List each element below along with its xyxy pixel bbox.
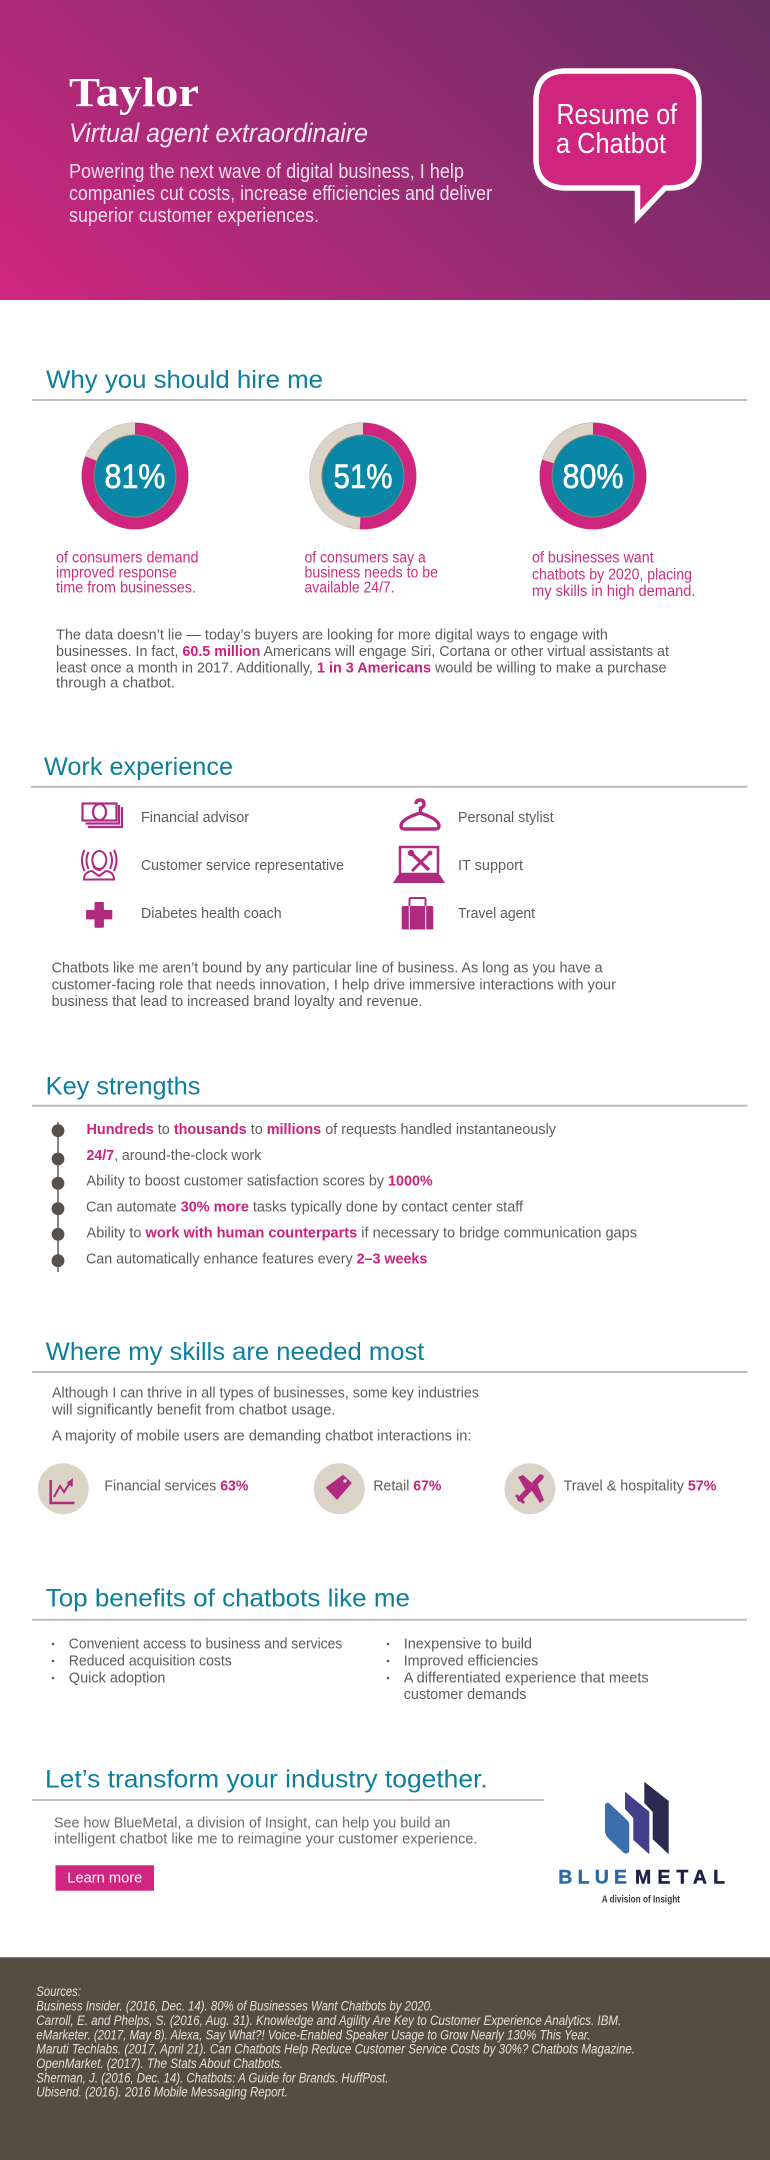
button: learn more bbox=[56, 1865, 154, 1891]
text block: industries intro: will significantly benefit from chatbot usage. bbox=[51, 1402, 336, 1419]
icon: price tag bbox=[314, 1463, 365, 1514]
label: travel agent: Travel agent bbox=[458, 905, 536, 922]
panel: header banner bbox=[0, 0, 770, 300]
list: benefits right: Inexpensive to build bbox=[404, 1635, 532, 1652]
text block: line of business paragraph: business that lead to increased brand loyalty and revenue. bbox=[52, 993, 422, 1010]
donut chart: 51% bbox=[310, 422, 416, 530]
speech bubble: a Chatbot bbox=[556, 128, 666, 160]
caption: 80%: my skills in high demand. bbox=[532, 583, 696, 600]
timeline bbox=[52, 1122, 64, 1272]
icon: laptop with tools bbox=[393, 847, 445, 883]
caption: 80%: chatbots by 2020, placing bbox=[532, 566, 692, 583]
text block: sources bbox=[36, 1984, 635, 2100]
logo: BlueMetal: METAL bbox=[635, 1866, 725, 1888]
logo: BlueMetal bbox=[558, 1782, 725, 1906]
speech bubble bbox=[536, 71, 699, 217]
donut chart: 81%: 81% bbox=[104, 458, 166, 496]
list of strengths: Hundreds to thousands to millions of requests handled instantaneously bbox=[86, 1121, 556, 1138]
icon: headset agent bbox=[82, 850, 116, 880]
text block: data paragraph: The data doesn’t lie — today’s buyers are looking for more digital ways to engage with bbox=[56, 626, 608, 643]
caption: 81%: improved response bbox=[56, 565, 177, 582]
stat: financial services: Financial services 63% bbox=[104, 1478, 248, 1495]
stat: retail: Retail 67% bbox=[373, 1478, 441, 1495]
subtitle: Virtual agent extraordinaire bbox=[69, 118, 368, 148]
list: benefits left: Quick adoption bbox=[69, 1669, 166, 1686]
list: benefits left: Convenient access to business and services bbox=[69, 1635, 342, 1652]
text block: sources: Maruti Techlabs. (2017, April 21). Can Chatbots Help Reduce Customer Service Costs by 30%? Chatbots Magazine. bbox=[36, 2042, 635, 2057]
text block: line of business paragraph: Chatbots like me aren’t bound by any particular line of business. As long as you have a bbox=[52, 960, 603, 977]
heading: Let’s transform your industry together. bbox=[45, 1766, 488, 1794]
list of strengths: 24/7, around-the-clock work bbox=[86, 1147, 262, 1164]
stat: travel and hospitality: Travel & hospitality 57% bbox=[564, 1478, 716, 1495]
text block: call to action copy bbox=[54, 1814, 477, 1848]
label: customer service representative: Customer service representative bbox=[141, 857, 344, 874]
list of strengths: Ability to boost customer satisfaction scores by 1000% bbox=[86, 1173, 433, 1190]
donut chart: 80%: 80% bbox=[562, 458, 624, 496]
heading: Where my skills are needed most bbox=[46, 1338, 424, 1366]
caption: 80% bbox=[532, 550, 696, 600]
text block: industries intro: A majority of mobile users are demanding chatbot interactions in: bbox=[52, 1427, 472, 1444]
title: Taylor bbox=[69, 69, 199, 115]
icon: money bbox=[82, 804, 122, 827]
list: benefits right bbox=[387, 1635, 649, 1703]
list of strengths: Can automatically enhance features every 2–3 weeks bbox=[86, 1250, 427, 1267]
heading: Work experience bbox=[44, 753, 233, 781]
text block: sources: Sherman, J. (2016, Dec. 14). Chatbots: A Guide for Brands. HuffPost. bbox=[36, 2070, 389, 2085]
list: benefits right: A differentiated experience that meets bbox=[404, 1669, 649, 1686]
text block: data paragraph bbox=[56, 626, 670, 692]
label: personal stylist: Personal stylist bbox=[458, 809, 554, 826]
caption: 81% bbox=[56, 550, 198, 597]
label: diabetes health coach: Diabetes health coach bbox=[141, 905, 282, 922]
text block: sources: Sources: bbox=[36, 1984, 81, 1999]
intro text: superior customer experiences. bbox=[69, 205, 319, 227]
text block: line of business paragraph: customer-facing role that needs innovation, I help drive immersive interactions with your bbox=[52, 976, 616, 993]
panel: work experience bbox=[30, 753, 748, 1010]
icon: suitcase bbox=[402, 898, 433, 930]
text block: data paragraph: least once a month in 2017. Additionally, 1 in 3 Americans would be willing to make a purchase bbox=[56, 660, 666, 677]
panel: where my skills are needed most bbox=[32, 1338, 748, 1514]
panel: sources footer bbox=[0, 1957, 770, 2160]
text block: data paragraph: through a chatbot. bbox=[56, 675, 175, 692]
intro text: Powering the next wave of digital business, I help bbox=[69, 161, 464, 183]
panel: call to action bbox=[32, 1766, 725, 1906]
logo: BlueMetal: BLUE bbox=[558, 1866, 627, 1888]
caption: 51%: available 24/7. bbox=[304, 580, 394, 597]
text block: call to action copy: intelligent chatbot like me to reimagine your customer experience. bbox=[54, 1831, 477, 1848]
icon: medical cross bbox=[86, 902, 112, 928]
caption: 51%: business needs to be bbox=[304, 565, 438, 582]
label: financial advisor: Financial advisor bbox=[141, 809, 249, 826]
donut chart: 81% bbox=[82, 422, 188, 530]
text block: call to action copy: See how BlueMetal, a division of Insight, can help you build an bbox=[54, 1814, 450, 1831]
icon: hanger bbox=[401, 800, 439, 829]
text block: line of business paragraph bbox=[52, 960, 616, 1010]
text block: sources: Carroll, E. and Phelps, S. (2016, Aug. 31). Knowledge and Agility Are Key to Customer Experience Analytics. IBM. bbox=[36, 2013, 621, 2028]
list of strengths: Ability to work with human counterparts if necessary to bridge communication gaps bbox=[86, 1224, 637, 1241]
list of strengths bbox=[86, 1121, 637, 1267]
list of strengths: Can automate 30% more tasks typically done by contact center staff bbox=[86, 1199, 524, 1216]
text block: sources: Ubisend. (2016). 2016 Mobile Messaging Report. bbox=[36, 2085, 288, 2100]
button: learn more: Learn more bbox=[67, 1869, 142, 1886]
caption: 81%: time from businesses. bbox=[56, 580, 196, 597]
text block: sources: eMarketer. (2017, May 8). Alexa, Say What?! Voice-Enabled Speaker Usage to Grow Nearly 130% This Year. bbox=[36, 2027, 590, 2042]
panel: key strengths bbox=[32, 1072, 748, 1272]
heading: Key strengths bbox=[46, 1072, 200, 1100]
caption: 51% bbox=[304, 550, 438, 597]
icon: airplane bbox=[504, 1463, 556, 1514]
caption: 81%: of consumers demand bbox=[56, 550, 198, 567]
intro text bbox=[69, 161, 492, 227]
list: benefits right: Improved efficiencies bbox=[404, 1652, 538, 1669]
text block: sources: OpenMarket. (2017). The Stats About Chatbots. bbox=[36, 2056, 283, 2071]
panel: why you should hire me bbox=[32, 366, 748, 692]
list: benefits left bbox=[52, 1635, 342, 1686]
logo: BlueMetal: A division of Insight bbox=[602, 1894, 680, 1906]
donut chart: 80% bbox=[540, 422, 646, 530]
text block: industries intro bbox=[51, 1385, 479, 1444]
list: benefits right: customer demands bbox=[404, 1686, 526, 1703]
intro text: companies cut costs, increase efficiencies and deliver bbox=[69, 183, 492, 205]
text block: industries intro: Although I can thrive in all types of businesses, some key industries bbox=[52, 1385, 479, 1402]
panel: top benefits bbox=[32, 1585, 747, 1703]
text block: sources: Business Insider. (2016, Dec. 14). 80% of Businesses Want Chatbots by 2020. bbox=[36, 1998, 433, 2013]
heading: Why you should hire me bbox=[46, 366, 323, 394]
caption: 80%: of businesses want bbox=[532, 550, 654, 567]
text block: data paragraph: businesses. In fact, 60.5 million Americans will engage Siri, Cortana or other virtual assistants at bbox=[56, 643, 670, 660]
donut chart: 51%: 51% bbox=[334, 458, 392, 496]
icon: growth chart bbox=[38, 1463, 89, 1514]
label: IT support: IT support bbox=[458, 857, 524, 874]
list: benefits left: Reduced acquisition costs bbox=[69, 1652, 232, 1669]
heading: Top benefits of chatbots like me bbox=[46, 1585, 410, 1613]
speech bubble: Resume of bbox=[556, 99, 678, 131]
caption: 51%: of consumers say a bbox=[304, 550, 426, 567]
